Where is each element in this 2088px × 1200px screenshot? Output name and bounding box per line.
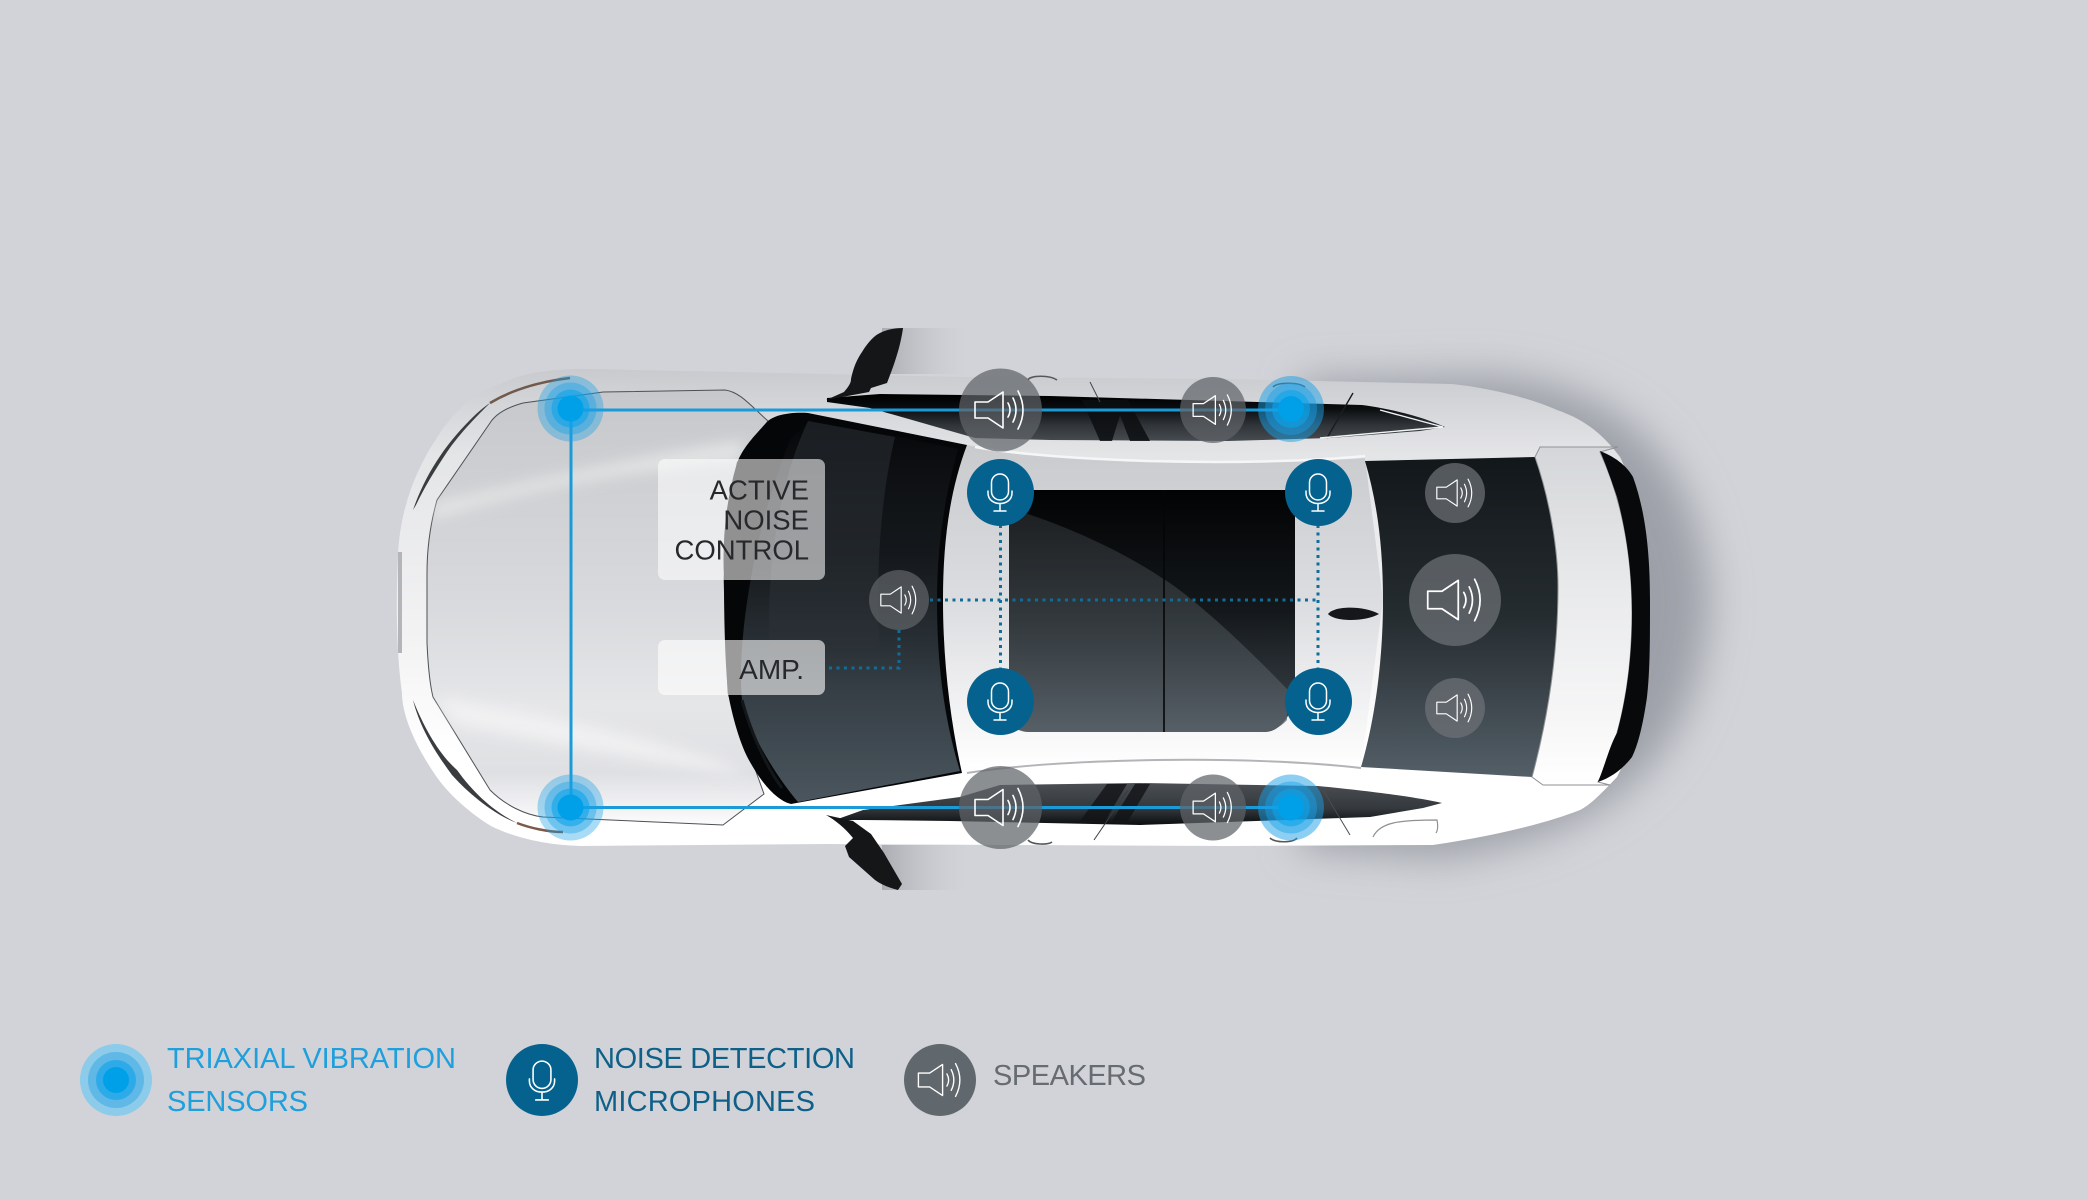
sunroof glass — [1009, 490, 1295, 732]
sunroof — [1009, 490, 1295, 732]
legend — [80, 1043, 1146, 1118]
hood reflection lower — [435, 697, 745, 775]
roof rail highlight top — [975, 447, 1365, 462]
legend: microphones: NOISE DETECTION — [594, 1043, 855, 1075]
legend: speakers: SPEAKERS — [993, 1060, 1146, 1092]
legend: speakers — [904, 1044, 1146, 1116]
bottom side window — [835, 783, 1442, 825]
label: amp — [658, 640, 825, 695]
door handle marks — [1028, 376, 1305, 844]
microphone: front top — [967, 459, 1034, 526]
headlight trim top — [490, 378, 570, 403]
front badge bar — [398, 552, 402, 653]
mirror shadow top — [882, 328, 967, 374]
trunk lid — [1532, 447, 1632, 785]
sensor: rear top — [1258, 376, 1324, 442]
car top view — [397, 328, 1710, 890]
bottom window pillars — [1080, 784, 1150, 821]
sensor: front top — [538, 376, 604, 442]
speaker: rear top — [1425, 463, 1485, 523]
label: active noise control: NOISE — [723, 504, 809, 536]
speaker: door top — [1180, 377, 1246, 443]
microphone: rear top — [1285, 459, 1352, 526]
rear window — [1361, 457, 1558, 777]
label: amp: AMP. — [739, 654, 804, 685]
legend: microphones — [506, 1043, 855, 1118]
top window pillars — [1082, 400, 1150, 441]
wiper — [742, 700, 782, 788]
hood — [427, 390, 768, 825]
windshield — [724, 413, 967, 804]
sunroof split — [1163, 490, 1165, 732]
hood reflection upper — [433, 440, 745, 520]
windshield inner reflection — [769, 421, 895, 650]
legend: vibration sensors: SENSORS — [167, 1086, 308, 1118]
blue sensor lines — [570, 409, 1290, 808]
sensor: rear bottom — [1258, 774, 1324, 840]
dotted amp connections — [827, 525, 1318, 669]
microphone: rear bottom — [1285, 668, 1352, 735]
roof rail highlight bottom — [967, 760, 1361, 773]
speaker: door bottom — [1180, 774, 1246, 840]
speaker: large bottom — [959, 766, 1042, 849]
sunroof reflection — [1009, 513, 1287, 732]
speaker: large top — [959, 368, 1042, 452]
car body — [397, 369, 1650, 846]
top window chrome tip — [1320, 410, 1443, 438]
door handle — [1328, 608, 1379, 620]
legend: vibration sensors — [80, 1043, 456, 1118]
label: active noise control: ACTIVE — [710, 474, 809, 506]
top door line — [1090, 382, 1100, 402]
legend: vibration sensors: TRIAXIAL VIBRATION — [167, 1043, 456, 1075]
microphone: front bottom — [967, 668, 1034, 735]
headlight strip bottom — [413, 700, 517, 823]
bottom door line — [1094, 790, 1128, 840]
speaker: rear centre — [1409, 554, 1501, 646]
bottom mirror — [826, 815, 902, 890]
car shadow — [1300, 375, 1710, 858]
headlight trim bottom — [517, 823, 563, 832]
top side window — [827, 394, 1445, 441]
rear wheel arch line — [1373, 820, 1438, 837]
label: active noise control — [658, 459, 825, 580]
speaker: front centre — [869, 570, 929, 630]
legend: microphones: MICROPHONES — [594, 1086, 815, 1118]
top rear quarter line — [1327, 393, 1353, 438]
top mirror — [826, 328, 903, 400]
bottom rear quarter line — [1323, 790, 1350, 835]
speaker: rear bottom — [1425, 678, 1485, 738]
headlight strip top — [413, 403, 490, 510]
label: active noise control: CONTROL — [675, 534, 809, 566]
sensor: front bottom — [538, 774, 604, 840]
windshield glass — [741, 421, 960, 802]
mirror shadow bottom — [882, 845, 967, 890]
rear glass crescent — [1598, 451, 1650, 782]
roof — [943, 445, 1383, 773]
